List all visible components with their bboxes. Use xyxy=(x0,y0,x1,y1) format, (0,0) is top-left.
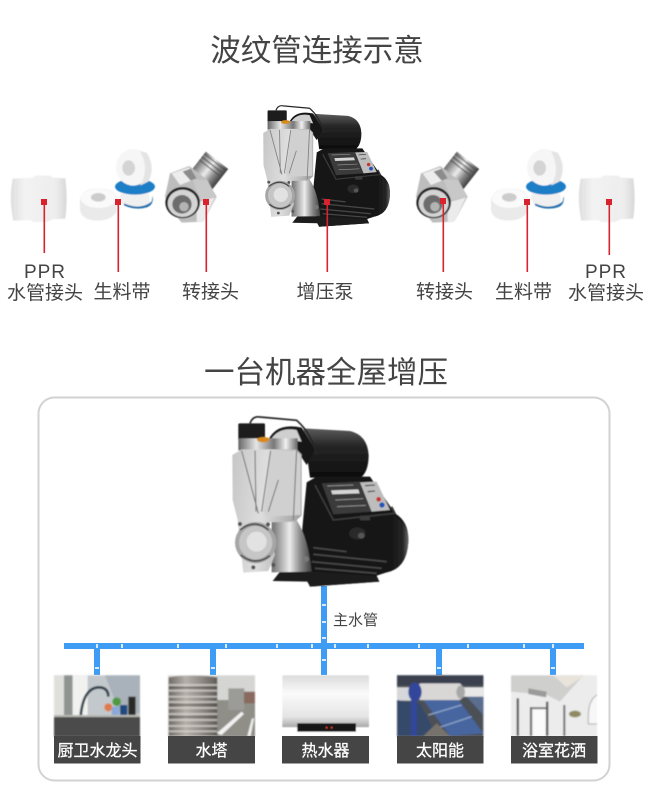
label: right PPR fitting: 水管接头 xyxy=(568,282,644,304)
part: right PTFE tape xyxy=(491,147,566,221)
caption: solar: 太阳能 xyxy=(416,742,464,760)
caption: bathroom shower: 浴室花洒 xyxy=(522,742,586,760)
tile: solar heater xyxy=(397,675,484,764)
label: left PPR fitting: 水管接头 xyxy=(7,282,83,304)
tile: bathroom shower xyxy=(511,675,598,764)
caption bar xyxy=(511,736,598,764)
callout: left adapter xyxy=(203,199,209,272)
icon: small booster pump xyxy=(263,106,390,227)
photo: water tower xyxy=(168,675,255,737)
caption: water tower: 水塔 xyxy=(195,742,228,760)
label: main water pipe: 主水管 xyxy=(333,612,378,629)
part: right adapter xyxy=(416,152,479,223)
caption: kitchen faucet: 厨卫水龙头 xyxy=(57,742,138,760)
title: whole house boost: 一台机器全屋增压 xyxy=(204,356,448,390)
callout: right PPR xyxy=(606,199,612,255)
part: right PPR fitting xyxy=(579,176,635,222)
callout: left tape xyxy=(115,199,121,272)
caption: water heater: 热水器 xyxy=(301,742,350,760)
caption bar xyxy=(282,736,369,764)
callout: right adapter xyxy=(440,198,446,272)
part: left PPR fitting xyxy=(11,176,67,222)
tile: water heater xyxy=(282,675,369,764)
tile: kitchen faucet xyxy=(54,675,141,764)
panel: whole house system xyxy=(38,398,610,780)
photo: bathroom xyxy=(511,675,597,737)
photo: solar xyxy=(397,675,483,737)
callout: right tape xyxy=(524,199,530,272)
callout: left PPR xyxy=(41,199,47,253)
callout: pump xyxy=(324,199,330,272)
tile: water tower xyxy=(168,675,255,764)
photo: kitchen xyxy=(54,675,140,737)
title: corrugated pipe connection: 波纹管连接示意 xyxy=(210,34,424,68)
label: left tape: 生料带 xyxy=(93,281,151,303)
caption bar xyxy=(54,736,140,764)
photo: water heater xyxy=(282,675,369,737)
label: right PPR fitting: PPR xyxy=(585,262,627,283)
label: pump: 增压泵 xyxy=(296,281,354,303)
caption bar xyxy=(397,736,484,764)
label: right adapter: 转接头 xyxy=(416,281,473,303)
label: left adapter: 转接头 xyxy=(182,281,239,303)
part: left PTFE tape xyxy=(80,147,155,221)
label: left PPR fitting: PPR xyxy=(24,262,66,283)
diagram: blue water pipes xyxy=(64,586,584,675)
icon: large booster pump xyxy=(232,417,408,587)
part: left adapter xyxy=(165,152,228,223)
caption bar xyxy=(168,736,255,764)
label: right tape: 生料带 xyxy=(495,281,552,303)
